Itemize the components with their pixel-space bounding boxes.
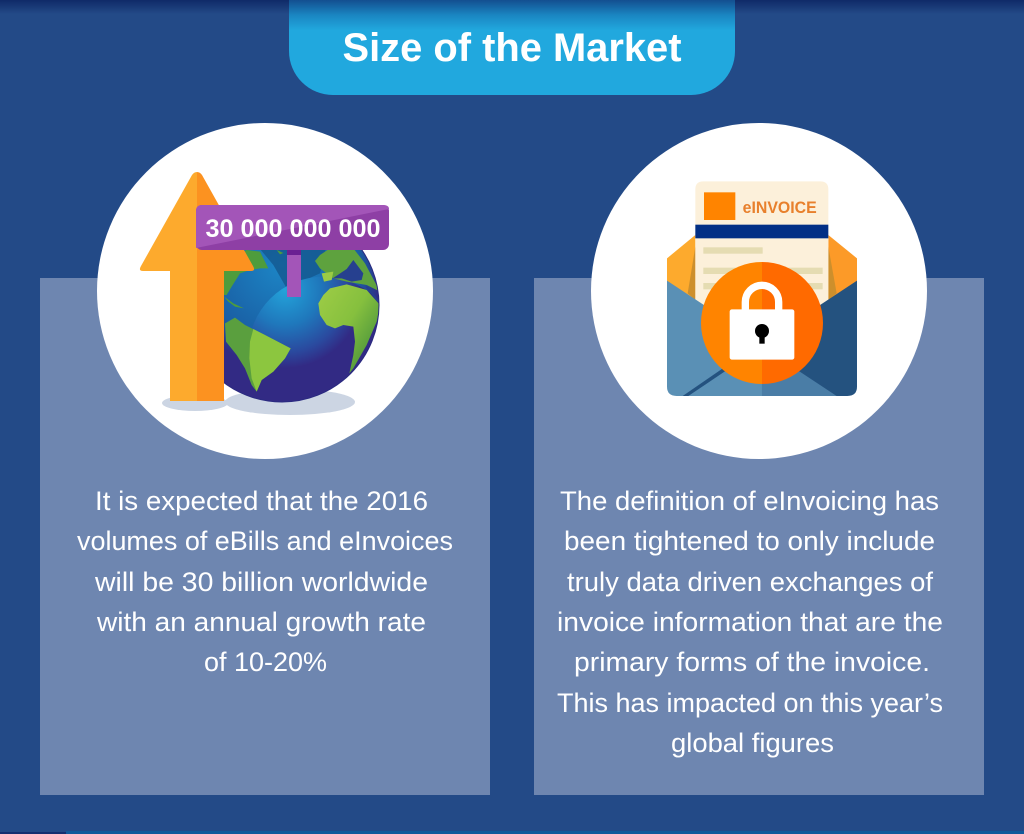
icon circle: left <box>97 123 433 459</box>
text block: right: been tightened to only include <box>564 526 935 556</box>
arrow <box>140 172 197 401</box>
text block: left: volumes of eBills and eInvoices <box>77 526 453 556</box>
text block: left: will be 30 billion worldwide <box>94 567 428 597</box>
title: Size of the Market <box>342 26 682 70</box>
icon: globe with rising arrow and sign <box>140 172 398 427</box>
panel: left <box>40 278 490 795</box>
text block: left: of 10-20% <box>204 647 327 677</box>
panel: right <box>534 278 984 795</box>
text block: right: truly data driven exchanges of <box>567 567 934 597</box>
envelope front <box>667 281 762 396</box>
text block: right: The definition of eInvoicing has <box>560 486 939 516</box>
sign value: 30 000 000 000 <box>206 215 380 243</box>
text block: left: with an annual growth rate <box>96 607 426 637</box>
text block: right: invoice information that are the <box>557 607 943 637</box>
sign <box>196 205 389 250</box>
continents <box>220 250 268 295</box>
sign post <box>287 250 301 297</box>
icon: locked envelope with eInvoice <box>667 181 857 396</box>
text block: right: This has impacted on this year’s <box>557 688 943 718</box>
invoice label: eINVOICE <box>743 199 817 217</box>
shadows <box>162 389 355 415</box>
text block: right <box>557 486 943 758</box>
title tab <box>289 0 735 95</box>
lock badge <box>701 262 762 384</box>
text block: left: It is expected that the 2016 <box>95 486 428 516</box>
text block: left <box>77 486 453 677</box>
text block: right: global figures <box>671 728 834 758</box>
invoice sheet <box>695 181 828 317</box>
icon circle: right <box>591 123 927 459</box>
text block: right: primary forms of the invoice. <box>574 647 930 677</box>
envelope back flap <box>667 235 695 303</box>
globe <box>224 250 380 402</box>
